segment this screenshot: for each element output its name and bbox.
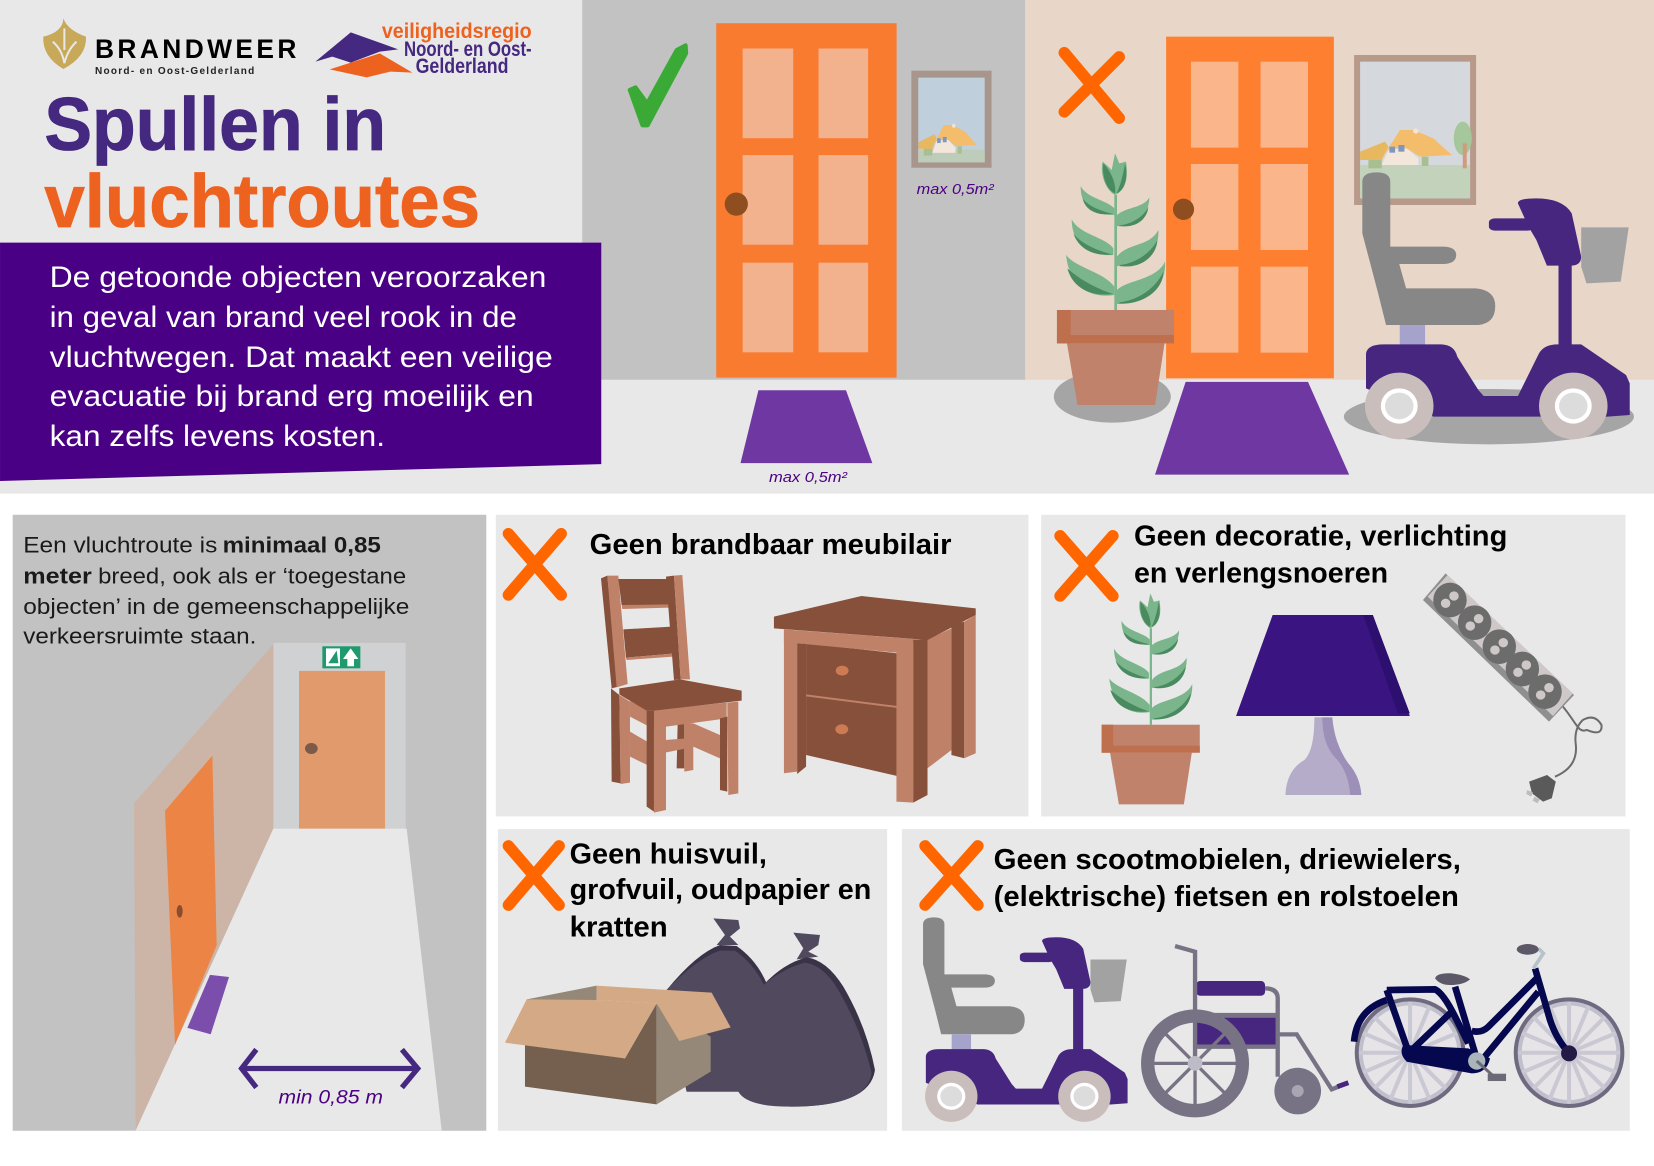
label: max 0,5m2 mat: max 0,5m² [769,470,848,486]
logo: Veiligheidsregio: Noord- en Oost- [404,38,532,61]
icon: orange cross top [1064,53,1119,118]
label: min 0,85 m: min 0,85 m [278,1087,383,1108]
heading: en verlengsnoeren [1134,557,1388,589]
intro text block: vluchtwegen. Dat maakt een veilige [50,341,553,374]
text: minimum width: Een vluchtroute is [23,533,217,558]
heading [994,844,1461,913]
nightstand [774,596,976,803]
panel: no decoration, lighting, extension cords [1041,515,1626,816]
panel: no household waste [498,829,887,1131]
door: correct scene [716,23,897,378]
text: minimum width: objecten’ in de gemeenschappelijke [23,594,409,619]
painting: small [911,71,992,168]
illustration: corridor [134,643,442,1131]
intro text block: De getoonde objecten veroorzaken [50,261,546,294]
plant [1102,593,1200,804]
plant: scene shadow and plant [1054,153,1174,423]
icon: cross [1060,536,1113,596]
icon: cross [508,534,561,595]
title [44,82,480,243]
intro text block: evacuatie bij brand erg moeilijk en [50,380,534,413]
arrow: width [242,1050,418,1088]
label: max 0,5m2 painting: max 0,5m² [917,182,995,198]
heading [1134,520,1507,589]
heading: grofvuil, oudpapier en [570,874,871,906]
trash bags [663,918,875,1107]
panel: minimum width corridor [13,515,486,1131]
heading [570,838,871,944]
heading: Geen huisvuil, [570,838,767,870]
cardboard box [505,986,731,1104]
table lamp [1236,615,1410,795]
intro text block [0,243,601,481]
logo: Brandweer [43,18,296,77]
logo: Veiligheidsregio: veiligheidsregio [382,20,532,43]
panel: no flammable furniture [496,515,1028,816]
logo: Brandweer: Noord- en Oost-Gelderland [95,66,254,77]
logo: Brandweer: BRANDWEER [95,34,296,64]
text: minimum width: minimaal 0,85 [223,533,381,558]
text: minimum width: meter [23,563,92,588]
extension cord [1423,573,1602,803]
panel: no mobility scooters, tricycles, bicycles, wheelchairs [902,829,1630,1131]
wheelchair [1148,946,1348,1114]
heading: (elektrische) fietsen en rolstoelen [994,881,1459,913]
chair [601,575,742,813]
title: vluchtroutes [44,159,480,243]
logo: Veiligheidsregio: Gelderland [416,55,508,78]
heading: Geen scootmobielen, driewielers, [994,844,1461,876]
text: minimum width: breed, ook als er ‘toegestane [98,563,406,588]
heading: kratten [570,912,668,944]
bicycle [1354,944,1622,1106]
door: incorrect scene [1166,37,1334,378]
intro text block: kan zelfs levens kosten. [50,420,385,453]
mobility scooter: scene [1344,172,1634,444]
icon: cross [508,846,559,905]
icon: green check [630,45,686,125]
intro text block: in geval van brand veel rook in de [50,301,517,334]
panel: wall incorrect [1025,0,1654,380]
painting: large [1354,55,1476,205]
text: minimum width: verkeersruimte staan. [23,623,256,648]
doormat: small [741,390,872,463]
text: minimum width [23,533,409,648]
heading: Geen brandbaar meubilair [590,529,951,561]
mobility scooter [923,917,1128,1122]
icon: cross [925,846,978,905]
logo: Veiligheidsregio [315,20,532,78]
title: Spullen in [44,82,386,166]
panel: wall correct [582,0,1025,380]
heading: Geen decoratie, verlichting [1134,520,1507,552]
doormat: large [1155,382,1349,475]
